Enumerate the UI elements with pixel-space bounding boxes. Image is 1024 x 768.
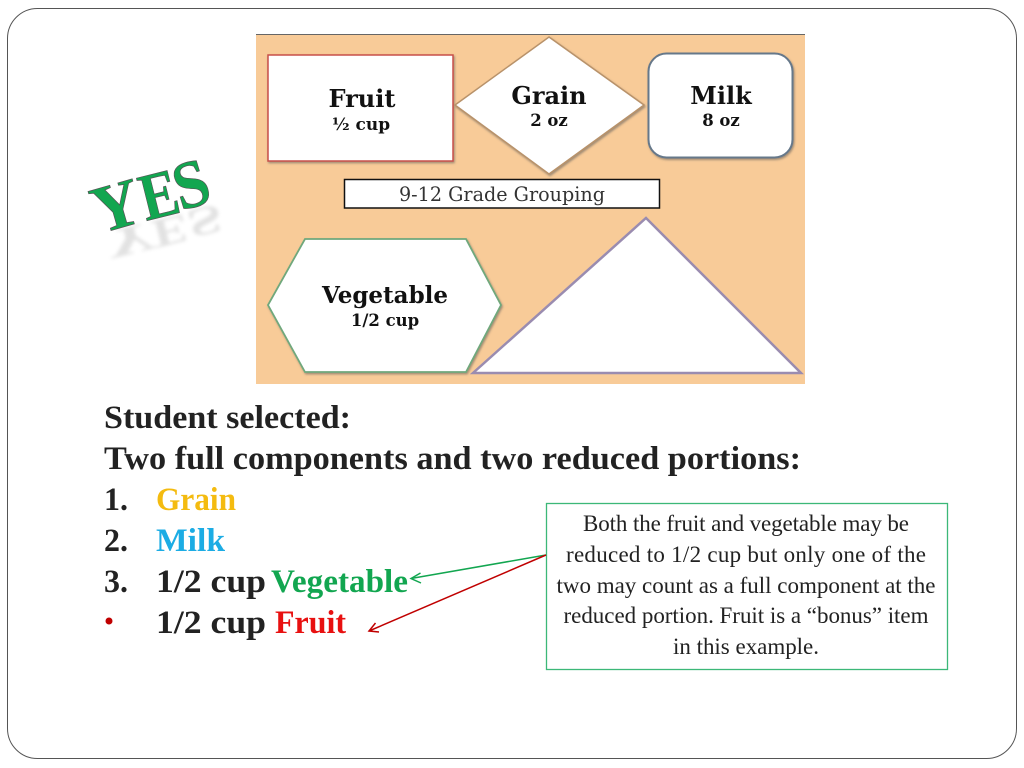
reflection of YES: S bbox=[183, 195, 227, 246]
vegetable hexagon bbox=[268, 239, 501, 372]
item 3 vegetable bbox=[104, 564, 408, 600]
line: student selected: Student selected: bbox=[104, 400, 351, 436]
callout box bbox=[546, 504, 948, 670]
grain diamond bbox=[455, 37, 644, 174]
item 2 milk: Milk bbox=[156, 523, 226, 559]
grade grouping label bbox=[344, 180, 660, 208]
arrow to fruit bbox=[369, 555, 546, 632]
vegetable hexagon: 1/2 cup bbox=[351, 311, 419, 330]
item 3 vegetable: 1/2 cup bbox=[156, 564, 266, 600]
student selection list bbox=[104, 400, 801, 641]
callout box: in this example. bbox=[673, 634, 819, 659]
empty triangle bbox=[473, 218, 801, 373]
line: two full components: Two full components and two reduced portions: bbox=[104, 441, 801, 477]
reflection of YES: E bbox=[148, 204, 193, 256]
tray background bbox=[256, 34, 805, 384]
YES letters: Y bbox=[83, 164, 150, 248]
word art: YES bbox=[83, 144, 227, 268]
item 4 fruit: Fruit bbox=[275, 605, 346, 641]
item 3 vegetable: Vegetable bbox=[271, 564, 408, 600]
fruit box: Fruit bbox=[329, 84, 395, 113]
item 4 fruit bbox=[106, 605, 346, 641]
meal tray image bbox=[256, 34, 805, 384]
YES letters bbox=[83, 144, 219, 248]
grain diamond: Grain bbox=[511, 81, 587, 110]
YES letters: S bbox=[164, 144, 219, 226]
callout box: reduced portion. Fruit is a “bonus” item bbox=[564, 603, 929, 628]
callout box: two may count as a full component at the bbox=[556, 573, 936, 598]
item 3 vegetable: 3. bbox=[104, 564, 128, 600]
fruit box: ½ cup bbox=[332, 115, 390, 135]
item 1 grain: 1. bbox=[104, 482, 128, 518]
reflection of YES bbox=[102, 195, 227, 268]
YES letters: E bbox=[132, 155, 187, 236]
fruit box bbox=[268, 55, 453, 161]
item 2 milk bbox=[104, 523, 226, 559]
milk rounded box bbox=[648, 54, 792, 158]
arrow to vegetable bbox=[411, 555, 546, 583]
item 1 grain: Grain bbox=[156, 482, 236, 518]
vegetable hexagon: Vegetable bbox=[321, 282, 448, 309]
grade grouping label: 9-12 Grade Grouping bbox=[399, 182, 605, 206]
callout box: Both the fruit and vegetable may be bbox=[583, 511, 909, 536]
milk rounded box: Milk bbox=[690, 81, 753, 110]
item 1 grain bbox=[104, 482, 236, 518]
milk rounded box: 8 oz bbox=[702, 111, 740, 130]
callout box: reduced to 1/2 cup but only one of the bbox=[566, 542, 926, 567]
item 2 milk: 2. bbox=[104, 523, 128, 559]
item 4 fruit: 1/2 cup bbox=[156, 605, 266, 641]
grain diamond: 2 oz bbox=[530, 111, 568, 130]
reflection of YES: Y bbox=[102, 212, 160, 268]
